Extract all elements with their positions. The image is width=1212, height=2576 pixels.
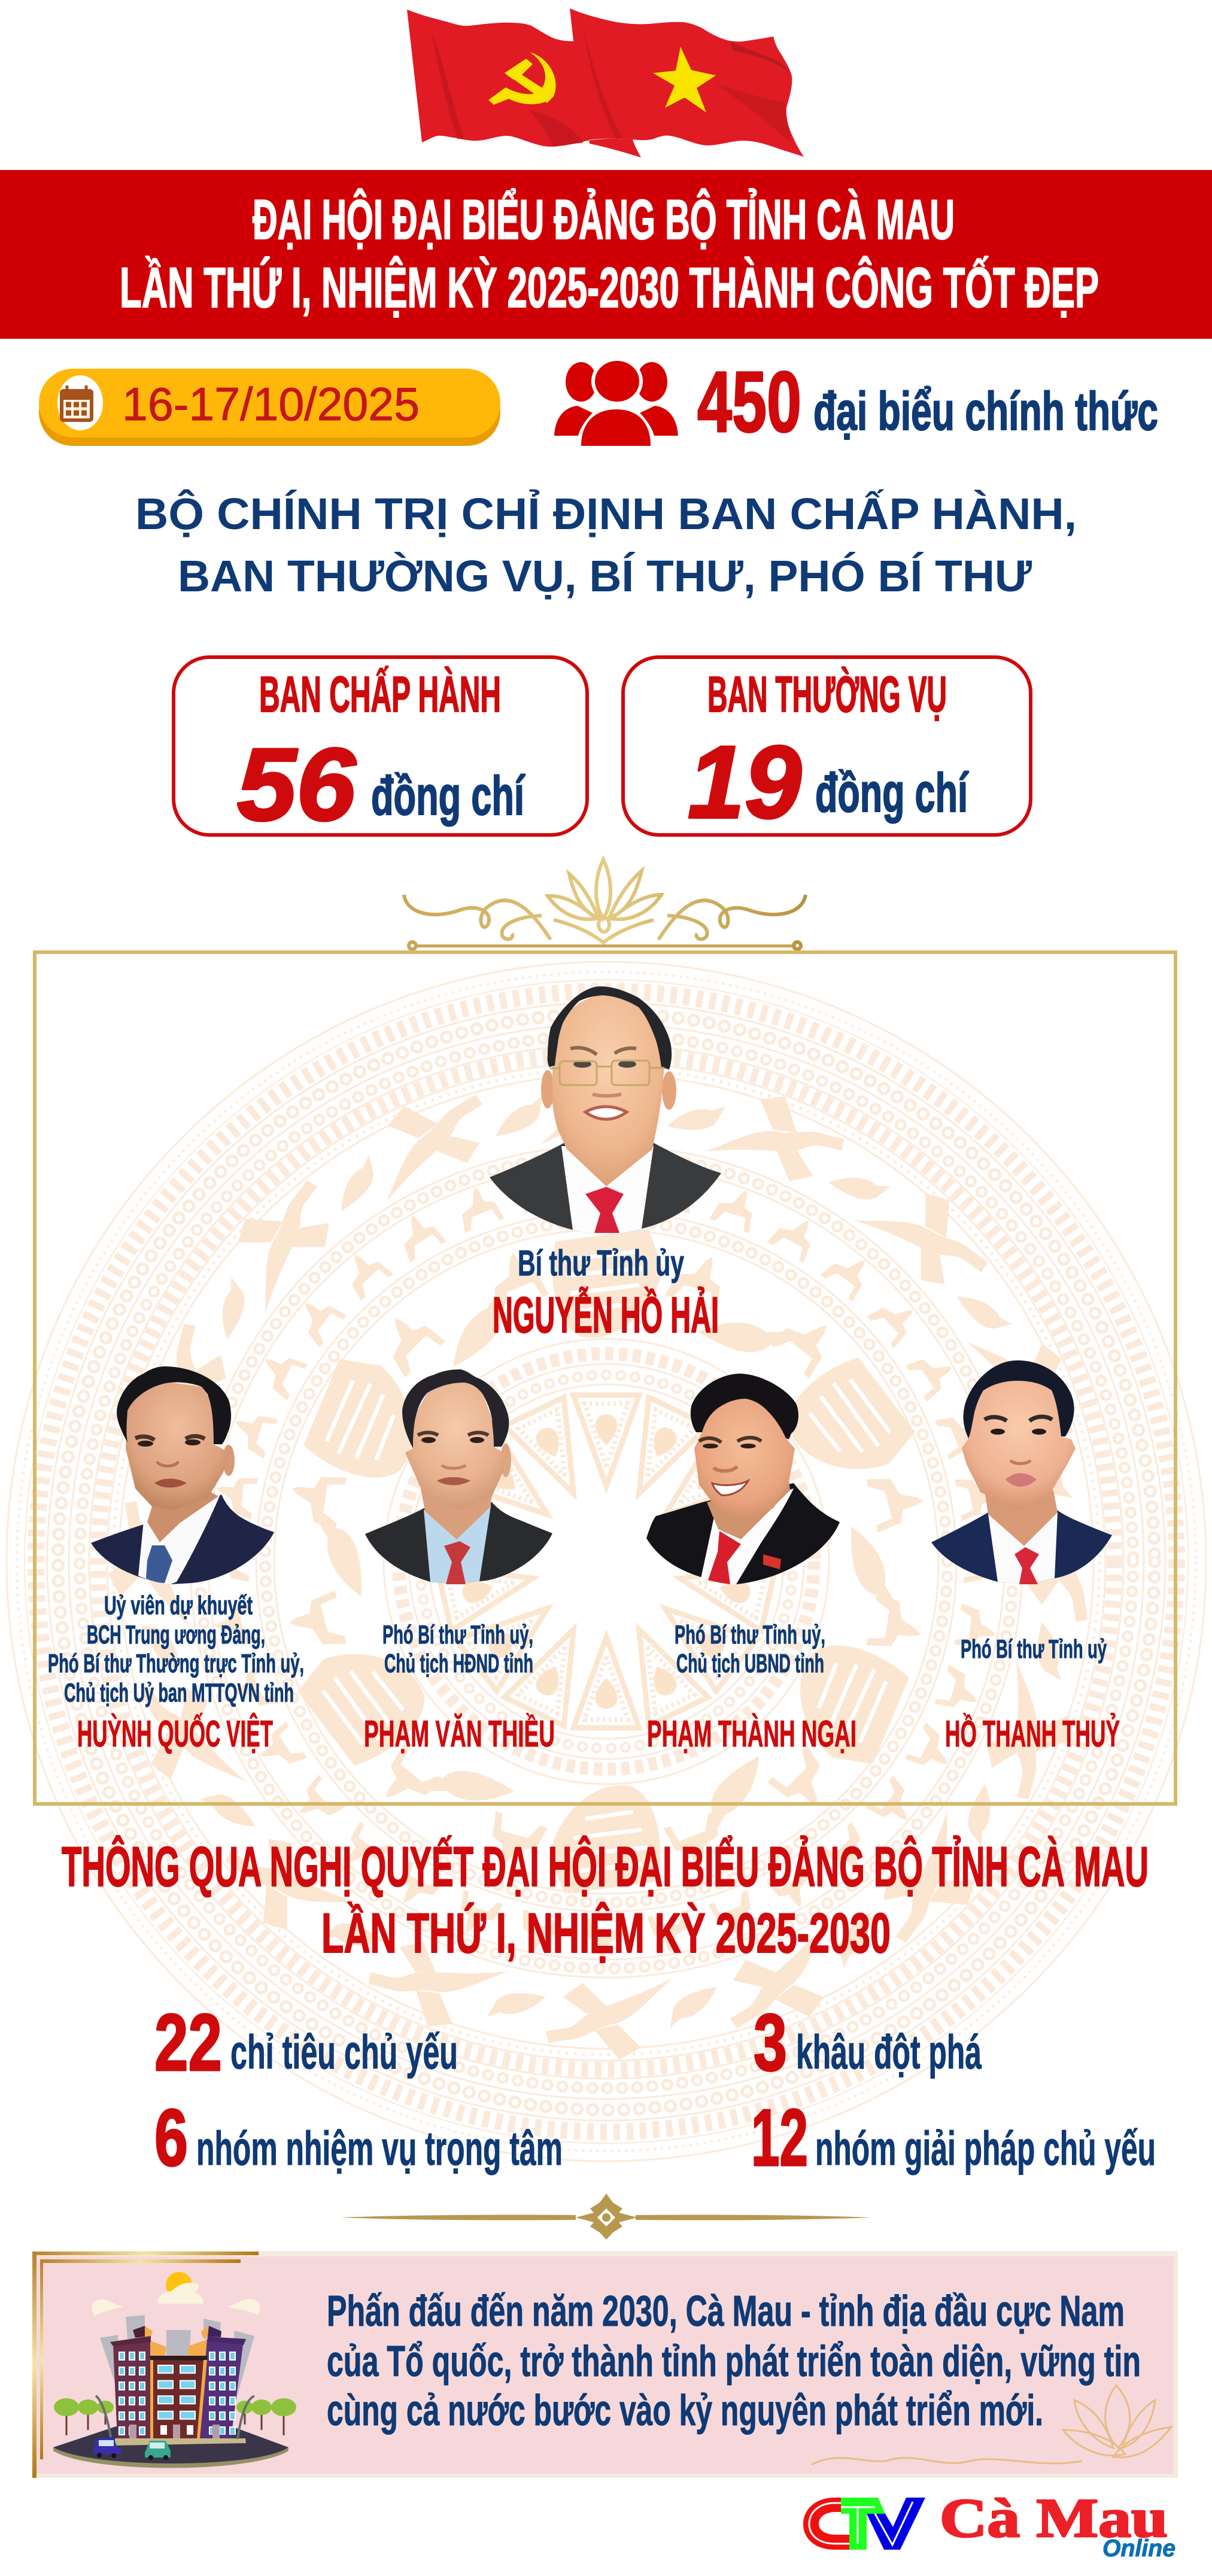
portrait: Nguyễn Hồ Hải	[490, 986, 721, 1234]
portrait: Phạm Thành Ngại	[646, 1374, 840, 1584]
icon: hammer and sickle	[488, 52, 556, 105]
stat: 22 targets: chỉ tiêu chủ yếu	[230, 2025, 458, 2079]
icon: calendar	[60, 385, 93, 422]
portrait: Phạm Văn Thiều	[365, 1369, 552, 1584]
panel: executive committee: BAN CHẤP HÀNH	[259, 666, 501, 722]
text: Hồ Thanh Thuỷ caption: Phó Bí thư Tỉnh uỷ	[961, 1635, 1107, 1664]
heading: politburo appointment: BỘ CHÍNH TRỊ CHỈ ĐỊNH BAN CHẤP HÀNH,	[135, 489, 1077, 539]
heading: resolution	[62, 1835, 1149, 1964]
text: Phạm Văn Thiều caption	[364, 1620, 555, 1755]
stat: 450 delegates: 450	[697, 354, 801, 450]
text: Phạm Văn Thiều caption: Chủ tịch HĐND tỉnh	[384, 1649, 533, 1678]
text: Phạm Thành Ngại caption	[647, 1620, 856, 1755]
heading: politburo appointment: BAN THƯỜNG VỤ, BÍ THƯ, PHÓ BÍ THƯ	[178, 551, 1032, 601]
logo: CTV Cà Mau Online	[803, 2487, 1175, 2562]
stat: 22 targets	[154, 1997, 458, 2088]
panel: executive committee	[174, 657, 587, 842]
text: secretary role: Bí thư Tỉnh ủy	[518, 1243, 684, 1283]
heading: resolution: LẦN THỨ I, NHIỆM KỲ 2025-2030	[321, 1901, 891, 1964]
background: bronze drum pattern	[7, 962, 1206, 2161]
panel: executive committee: đồng chí	[371, 765, 525, 827]
stat: 3 breakthroughs: 3	[754, 1997, 787, 2088]
stat: 12 solution groups	[751, 2092, 1156, 2183]
icon: delegates group	[554, 359, 678, 446]
heading: politburo appointment	[135, 489, 1077, 601]
logo: CTV Cà Mau Online: Cà Mau	[940, 2487, 1168, 2548]
icon: star	[653, 47, 716, 113]
text: Phạm Thành Ngại caption: PHẠM THÀNH NGẠI	[647, 1714, 856, 1755]
stat: 3 breakthroughs	[754, 1997, 982, 2088]
text: Huỳnh Quốc Việt caption: Phó Bí thư Thường trực Tỉnh uỷ,	[48, 1649, 304, 1678]
date pill: 16-17/10/2025	[122, 378, 420, 430]
icon: lotus outline	[812, 2385, 1171, 2465]
stat: 12 solution groups: 12	[751, 2092, 808, 2183]
icon: party flag	[407, 10, 641, 157]
text: Phạm Văn Thiều caption: Phó Bí thư Tỉnh uỷ,	[382, 1620, 533, 1650]
text: Huỳnh Quốc Việt caption: Chủ tịch Uỷ ban MTTQVN tỉnh	[64, 1678, 294, 1708]
date pill	[39, 369, 500, 446]
stat: 450 delegates	[697, 354, 1158, 450]
text: Huỳnh Quốc Việt caption: BCH Trung ương Đảng,	[87, 1620, 265, 1650]
text: Huỳnh Quốc Việt caption	[48, 1591, 304, 1755]
panel: standing committee: đồng chí	[815, 763, 969, 824]
text: Phạm Văn Thiều caption: PHẠM VĂN THIỀU	[364, 1714, 555, 1755]
stat: 6 task groups: 6	[154, 2092, 188, 2183]
panel: executive committee: 56	[237, 727, 356, 842]
title banner	[0, 170, 1212, 339]
text: secretary name: NGUYỄN HỒ HẢI	[493, 1287, 719, 1343]
stat: 3 breakthroughs: khâu đột phá	[796, 2025, 982, 2079]
panel: leadership frame	[35, 952, 1175, 1804]
portrait: Huỳnh Quốc Việt	[91, 1366, 274, 1584]
text: Phạm Thành Ngại caption: Phó Bí thư Tỉnh uỷ,	[675, 1620, 825, 1650]
panel: standing committee: BAN THƯỜNG VỤ	[707, 666, 947, 722]
panel: standing committee: 19	[688, 725, 801, 840]
text: Huỳnh Quốc Việt caption: HUỲNH QUỐC VIỆT	[77, 1714, 273, 1755]
logo: CTV Cà Mau Online: Online	[1102, 2535, 1175, 2562]
stat: 22 targets: 22	[154, 1997, 222, 2088]
stat: 6 task groups: nhóm nhiệm vụ trọng tâm	[196, 2122, 563, 2175]
text: Phạm Thành Ngại caption: Chủ tịch UBND tỉnh	[676, 1649, 824, 1678]
icon: national flag	[570, 8, 804, 157]
portrait: Hồ Thanh Thuỷ	[931, 1360, 1112, 1584]
ornament: gold lotus	[404, 859, 806, 949]
panel: standing committee	[623, 657, 1031, 840]
text: Hồ Thanh Thuỷ caption	[945, 1635, 1120, 1755]
stat: 6 task groups	[154, 2092, 563, 2183]
panel: 2030 goal	[32, 2251, 1178, 2478]
ornament: divider	[340, 2194, 872, 2240]
text: Huỳnh Quốc Việt caption: Uỷ viên dự khuyết	[104, 1591, 253, 1620]
icon: city illustration	[53, 2272, 296, 2468]
